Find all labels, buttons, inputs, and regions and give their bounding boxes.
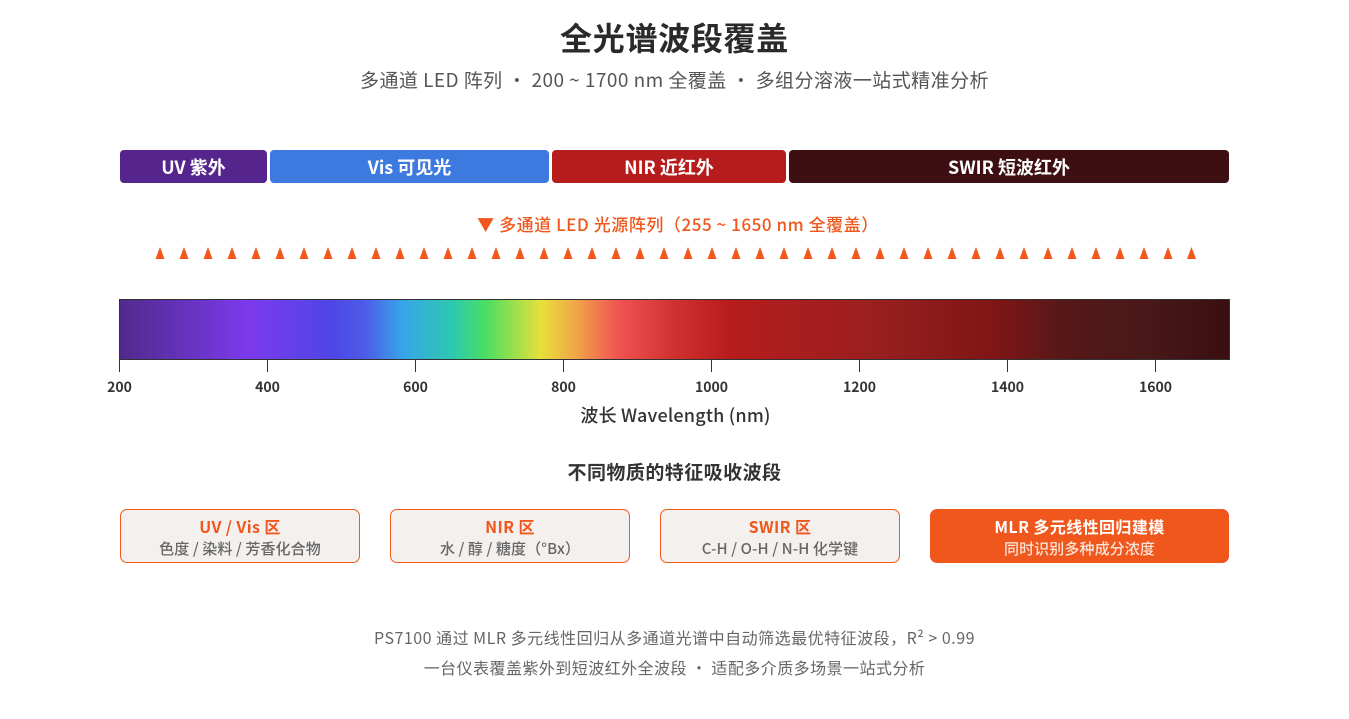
wavelength axis: 1600 [1139, 377, 1172, 397]
band: SWIR [789, 150, 1229, 183]
band: Vis [270, 150, 549, 183]
card: SWIR: SWIR 区 [749, 514, 811, 538]
band: UV: UV 紫外 [161, 154, 226, 180]
card: UV / Vis: UV / Vis 区 [199, 514, 281, 538]
card: NIR: NIR 区 [485, 514, 535, 538]
section heading: 不同物质的特征吸收波段 [568, 458, 781, 485]
band: NIR [552, 150, 786, 183]
wavelength axis: 400 [255, 377, 280, 397]
card: SWIR [660, 509, 900, 563]
card: NIR: 水 / 醇 / 糖度（°Bx） [440, 538, 580, 559]
card: MLR: 同时识别多种成分浓度 [1004, 538, 1155, 559]
card: MLR: MLR 多元线性回归建模 [994, 514, 1165, 538]
card: UV / Vis [120, 509, 360, 563]
axis title: 波长 Wavelength (nm) [580, 402, 771, 428]
title: 全光谱波段覆盖 [560, 14, 789, 60]
card: MLR [930, 509, 1229, 563]
wavelength axis: 1400 [991, 377, 1024, 397]
footnote line 2: 一台仪表覆盖紫外到短波红外全波段 · 适配多介质多场景一站式分析 [424, 655, 925, 679]
wavelength axis [107, 360, 1172, 397]
LED markers [156, 247, 1196, 259]
wavelength axis: 1200 [843, 377, 876, 397]
spectrum gradient bar [119, 299, 1230, 360]
card: SWIR: C-H / O-H / N-H 化学键 [702, 538, 858, 559]
wavelength axis: 200 [107, 377, 132, 397]
band: Vis: Vis 可见光 [368, 154, 451, 180]
wavelength axis: 1000 [695, 377, 728, 397]
card: NIR [390, 509, 630, 563]
wavelength axis: 800 [551, 377, 576, 397]
spectral band bar [120, 150, 1229, 183]
LED array label: ▼ 多通道 LED 光源阵列（255 ~ 1650 nm 全覆盖） [477, 211, 879, 236]
subtitle: 多通道 LED 阵列 · 200 ~ 1700 nm 全覆盖 · 多组分溶液一站式精准分析 [360, 66, 989, 93]
band: NIR: NIR 近红外 [624, 154, 714, 180]
card: UV / Vis: 色度 / 染料 / 芳香化合物 [159, 538, 321, 559]
band: SWIR: SWIR 短波红外 [948, 154, 1070, 180]
footnote line 1: PS7100 通过 MLR 多元线性回归从多通道光谱中自动筛选最优特征波段，R² > 0.99 [374, 625, 975, 649]
band: UV [120, 150, 267, 183]
wavelength axis: 600 [403, 377, 428, 397]
